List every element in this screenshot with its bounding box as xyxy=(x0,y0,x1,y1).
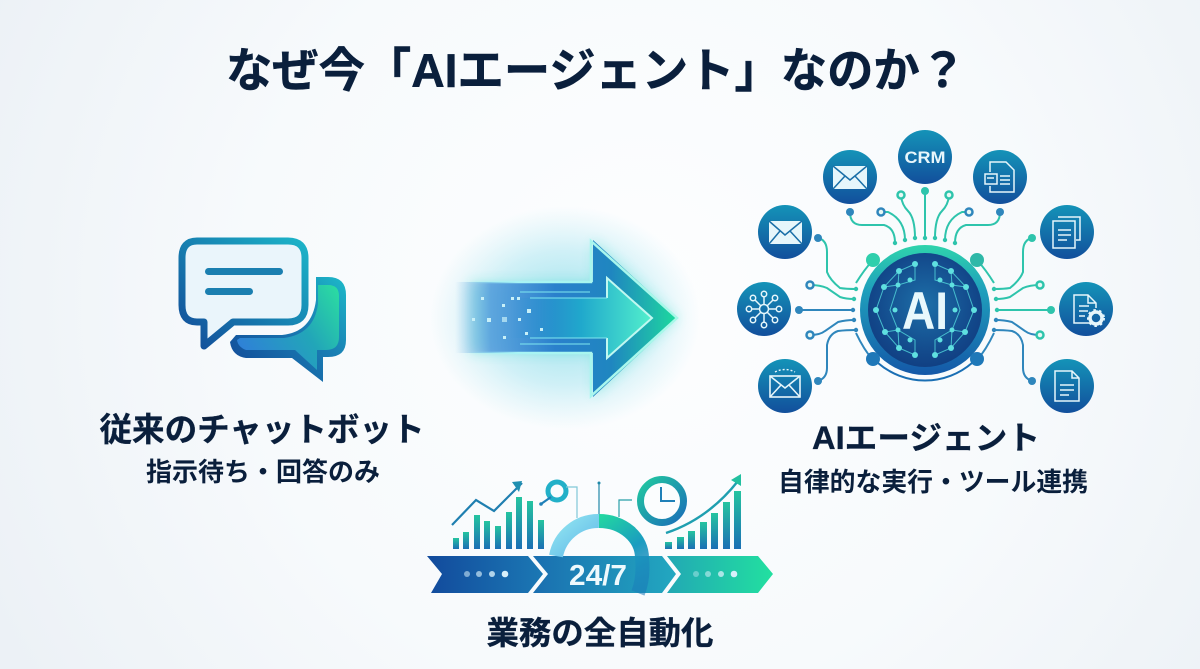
icon: chat bubbles xyxy=(182,241,346,382)
icon: document top right xyxy=(973,150,1027,204)
icon: envelope lower left xyxy=(758,359,812,413)
icon: CRM: CRM xyxy=(904,148,946,167)
icon: clock xyxy=(640,480,684,522)
text: AI agent description: 自律的な実行・ツール連携 xyxy=(778,467,1088,497)
AI hub: AI xyxy=(902,282,948,341)
panel: AI agent xyxy=(737,130,1113,497)
icon: network xyxy=(737,282,791,336)
gauge: 24/7 xyxy=(569,560,627,592)
circuit lines xyxy=(799,192,1050,381)
text: chatbot description: 指示待ち・回答のみ xyxy=(146,457,380,487)
icon: email left xyxy=(758,205,812,259)
icon: email top left xyxy=(823,150,877,204)
icon: documents right xyxy=(1040,205,1094,259)
heading: chatbot: 従来のチャットボット xyxy=(100,411,424,448)
title: なぜ今「AIエージェント」なのか？ xyxy=(226,44,966,97)
gauge xyxy=(556,482,642,593)
AI hub xyxy=(860,245,990,380)
bar chart left xyxy=(452,481,544,549)
panel: chatbot xyxy=(100,241,424,487)
bar chart right xyxy=(665,474,741,549)
circuit nodes xyxy=(795,187,1055,385)
process band xyxy=(427,556,773,593)
arrow xyxy=(430,206,700,430)
panel: full automation xyxy=(427,474,773,651)
icon: document lower right xyxy=(1040,359,1094,413)
icon: magnifier xyxy=(539,482,577,518)
heading: AI agent: AIエージェント xyxy=(812,420,1040,456)
icon: CRM xyxy=(898,130,952,184)
icon: document with gear xyxy=(1059,282,1113,336)
heading: full automation: 業務の全自動化 xyxy=(486,615,714,651)
